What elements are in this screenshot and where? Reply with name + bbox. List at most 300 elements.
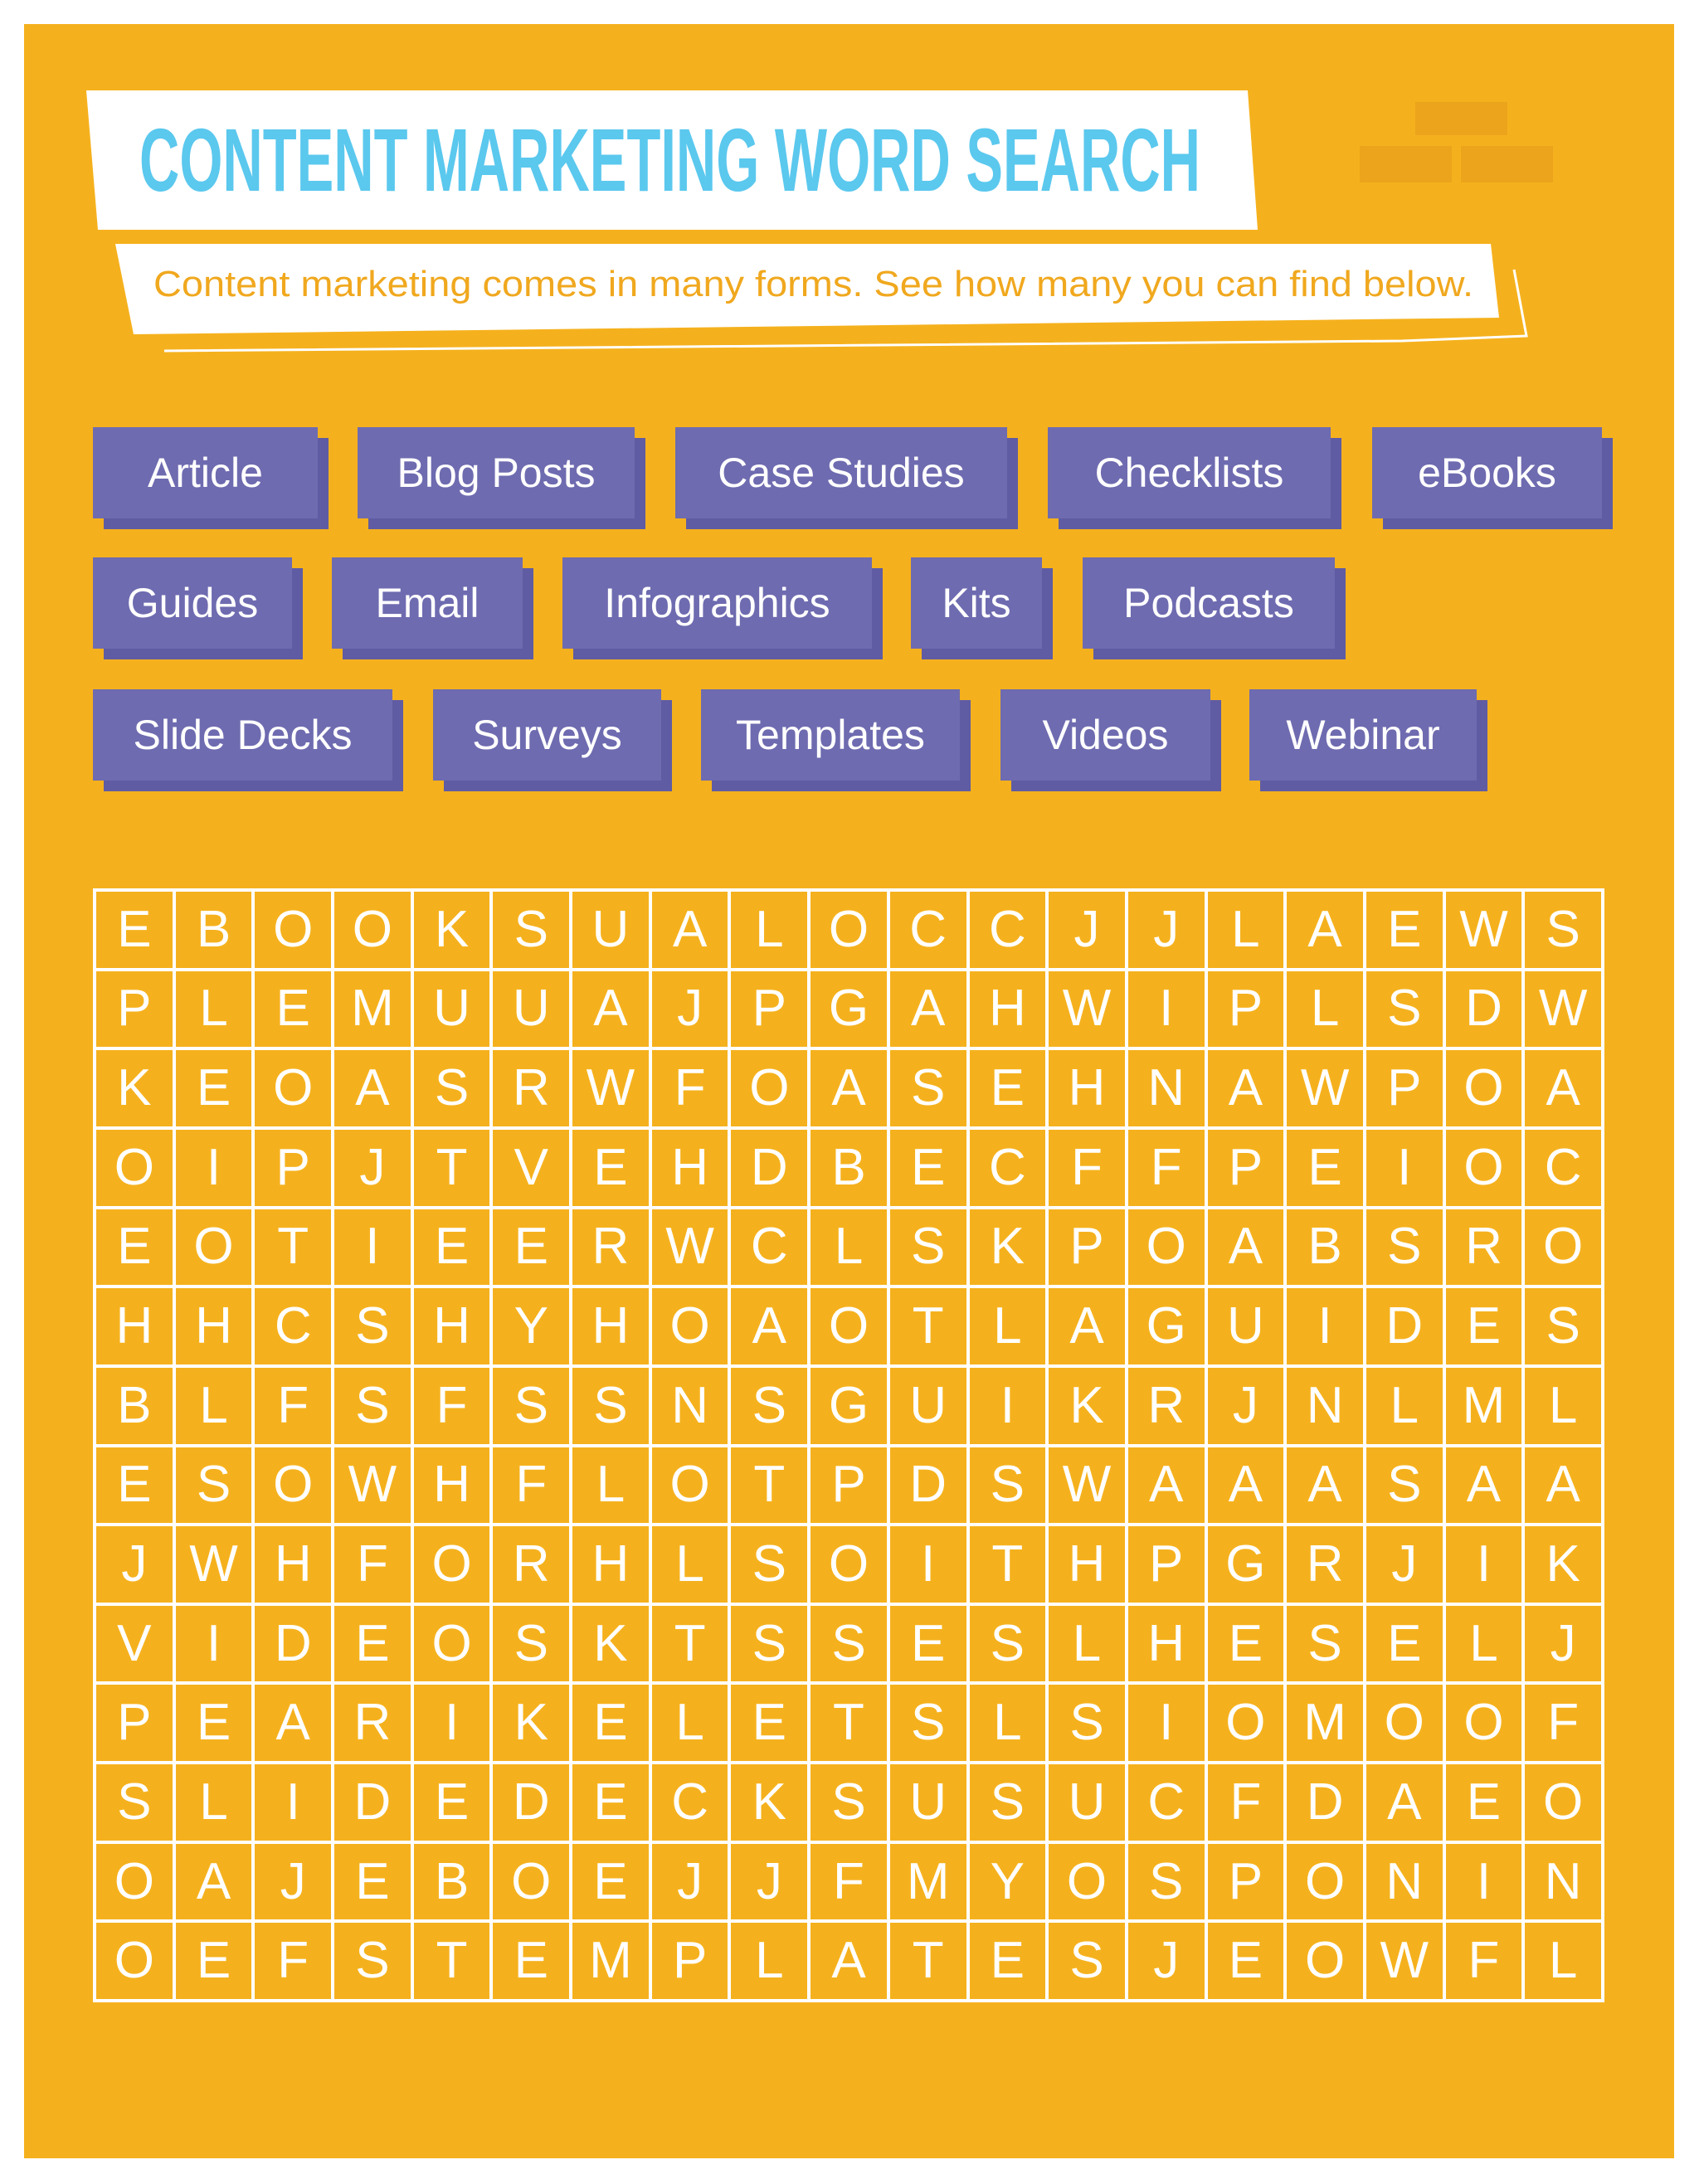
word search grid: T bbox=[833, 1694, 864, 1751]
subtitle banner bbox=[115, 244, 1526, 351]
word search grid: T bbox=[436, 1139, 468, 1196]
word search grid: A bbox=[593, 980, 628, 1037]
word search grid: O bbox=[1463, 1694, 1504, 1751]
word search grid: R bbox=[1307, 1535, 1343, 1593]
word search grid: A bbox=[1307, 901, 1342, 958]
word search grid: Y bbox=[991, 1853, 1025, 1910]
word search grid: G bbox=[1225, 1535, 1266, 1593]
word search grid: A bbox=[1229, 1218, 1263, 1275]
word search grid: S bbox=[355, 1932, 390, 1989]
word search grid: L bbox=[1073, 1615, 1101, 1672]
tag: Videos bbox=[1000, 689, 1210, 781]
word search grid: O bbox=[829, 901, 869, 958]
tag: Surveys bbox=[433, 689, 661, 781]
word search grid: L bbox=[596, 1456, 625, 1513]
word search grid: M bbox=[351, 980, 394, 1037]
word search grid: T bbox=[913, 1932, 944, 1989]
word search grid: E bbox=[197, 1059, 231, 1116]
word search grid: N bbox=[1385, 1853, 1423, 1910]
word search grid: A bbox=[1467, 1456, 1501, 1513]
word search grid: K bbox=[435, 901, 469, 958]
word search grid: O bbox=[749, 1059, 789, 1116]
word search grid: E bbox=[355, 1853, 390, 1910]
word search grid: M bbox=[589, 1932, 632, 1989]
tag: Guides bbox=[93, 557, 292, 649]
word search grid: G bbox=[829, 980, 869, 1037]
word search grid: O bbox=[114, 1139, 154, 1196]
word search grid: J bbox=[1074, 901, 1100, 958]
word search grid: L bbox=[199, 1773, 228, 1831]
tag: eBooks bbox=[1372, 427, 1602, 518]
word search grid: F bbox=[1071, 1139, 1103, 1196]
word search grid: O bbox=[353, 901, 392, 958]
word search grid: A bbox=[673, 901, 707, 958]
word search grid: P bbox=[673, 1932, 707, 1989]
word search grid: W bbox=[587, 1059, 635, 1116]
word search grid: J bbox=[1391, 1535, 1417, 1593]
word search grid: S bbox=[514, 1377, 548, 1434]
word search grid: O bbox=[1305, 1932, 1345, 1989]
tag: Infographics: Infographics bbox=[604, 580, 830, 626]
word search grid: A bbox=[276, 1694, 310, 1751]
word search grid: B bbox=[435, 1853, 469, 1910]
word search grid: P bbox=[752, 980, 786, 1037]
word search grid: L bbox=[835, 1218, 863, 1275]
subtitle banner: Content marketing comes in many forms. See how many you can find below. bbox=[153, 264, 1473, 304]
tag: Slide Decks: Slide Decks bbox=[133, 712, 352, 758]
word search grid: W bbox=[1301, 1059, 1349, 1116]
word search grid: P bbox=[117, 1694, 152, 1751]
word search grid: I bbox=[1397, 1139, 1411, 1196]
word search grid: A bbox=[911, 980, 945, 1037]
word search grid: L bbox=[199, 980, 228, 1037]
word search grid: L bbox=[1390, 1377, 1419, 1434]
word search grid: E bbox=[1467, 1773, 1501, 1831]
word search grid: H bbox=[275, 1535, 312, 1593]
word search grid: O bbox=[1543, 1773, 1583, 1831]
tag: Article bbox=[93, 427, 318, 518]
word search grid bbox=[93, 888, 1604, 2002]
word search grid: S bbox=[752, 1377, 786, 1434]
word search grid: K bbox=[593, 1615, 628, 1672]
word search grid: S bbox=[514, 901, 548, 958]
word search grid: H bbox=[195, 1297, 232, 1355]
word search grid: H bbox=[671, 1139, 708, 1196]
word search grid: B bbox=[117, 1377, 152, 1434]
word search grid: S bbox=[831, 1773, 866, 1831]
tag: Checklists bbox=[1048, 427, 1331, 518]
word search grid: P bbox=[1229, 1853, 1263, 1910]
word search grid: O bbox=[1146, 1218, 1186, 1275]
word search grid: O bbox=[273, 1456, 313, 1513]
word search grid: U bbox=[433, 980, 470, 1037]
word search grid: A bbox=[831, 1932, 866, 1989]
word search grid: L bbox=[1311, 980, 1339, 1037]
tag: Email: Email bbox=[375, 580, 480, 626]
word search grid: E bbox=[117, 1218, 152, 1275]
word search grid: L bbox=[755, 1932, 784, 1989]
tag: eBooks: eBooks bbox=[1418, 450, 1556, 496]
word search grid: S bbox=[1307, 1615, 1342, 1672]
word search grid: O bbox=[511, 1853, 551, 1910]
word search grid: V bbox=[514, 1139, 548, 1196]
word search grid: F bbox=[436, 1377, 468, 1434]
word search grid: S bbox=[514, 1615, 548, 1672]
word search grid: L bbox=[1549, 1377, 1577, 1434]
word search grid: W bbox=[189, 1535, 238, 1593]
word search grid: B bbox=[197, 901, 231, 958]
word search grid: J bbox=[757, 1853, 782, 1910]
word search grid: S bbox=[991, 1615, 1025, 1672]
word search grid: A bbox=[1229, 1456, 1263, 1513]
word search grid: Y bbox=[514, 1297, 548, 1355]
word search grid: U bbox=[1069, 1773, 1105, 1831]
word search grid: E bbox=[593, 1853, 628, 1910]
word search grid: O bbox=[1463, 1059, 1504, 1116]
word search grid: I bbox=[207, 1139, 221, 1196]
word search grid: E bbox=[593, 1694, 628, 1751]
word search grid: F bbox=[1547, 1694, 1579, 1751]
word search grid: O bbox=[1305, 1853, 1345, 1910]
tag: Checklists: Checklists bbox=[1095, 450, 1283, 496]
word search grid: J bbox=[677, 1853, 703, 1910]
word search grid: M bbox=[1463, 1377, 1505, 1434]
word search grid: D bbox=[275, 1615, 312, 1672]
word search grid: H bbox=[433, 1456, 470, 1513]
word search grid: S bbox=[1387, 1218, 1421, 1275]
word search grid: H bbox=[1069, 1535, 1105, 1593]
word search grid: H bbox=[592, 1297, 629, 1355]
word search grid: I bbox=[1159, 980, 1173, 1037]
word search grid: D bbox=[353, 1773, 391, 1831]
tag: Article: Article bbox=[148, 450, 263, 496]
word search grid: O bbox=[114, 1853, 154, 1910]
word search grid: E bbox=[197, 1932, 231, 1989]
word search grid: E bbox=[276, 980, 310, 1037]
word search grid: E bbox=[991, 1932, 1025, 1989]
word search grid: O bbox=[431, 1535, 472, 1593]
word search grid: D bbox=[1307, 1773, 1343, 1831]
word search grid: S bbox=[435, 1059, 469, 1116]
word search grid: A bbox=[197, 1853, 231, 1910]
word search grid: R bbox=[1465, 1218, 1502, 1275]
tag: Videos: Videos bbox=[1042, 712, 1168, 758]
word search grid: W bbox=[665, 1218, 714, 1275]
word search grid: F bbox=[1151, 1139, 1182, 1196]
word search grid: W bbox=[1380, 1932, 1429, 1989]
word search grid: I bbox=[445, 1694, 459, 1751]
word search grid: O bbox=[1463, 1139, 1504, 1196]
tag: Webinar: Webinar bbox=[1286, 712, 1440, 758]
word search grid: C bbox=[1147, 1773, 1185, 1831]
word search grid: O bbox=[114, 1932, 154, 1989]
word search grid: T bbox=[674, 1615, 706, 1672]
word search grid: S bbox=[197, 1456, 231, 1513]
word search grid: R bbox=[513, 1535, 550, 1593]
tag: Slide Decks bbox=[93, 689, 392, 781]
word search grid: L bbox=[675, 1535, 704, 1593]
word search grid: L bbox=[1549, 1932, 1577, 1989]
word search grid: L bbox=[993, 1297, 1022, 1355]
word search grid: G bbox=[1146, 1297, 1186, 1355]
word search grid: T bbox=[436, 1932, 468, 1989]
word search grid: E bbox=[593, 1773, 628, 1831]
word search grid: S bbox=[355, 1297, 390, 1355]
word search grid: O bbox=[829, 1535, 869, 1593]
word search grid: E bbox=[1307, 1139, 1342, 1196]
word search grid: D bbox=[751, 1139, 788, 1196]
word search grid: A bbox=[1387, 1773, 1421, 1831]
tag: Kits bbox=[911, 557, 1042, 649]
word search grid: I bbox=[1159, 1694, 1173, 1751]
word search grid: N bbox=[1147, 1059, 1185, 1116]
title banner bbox=[86, 90, 1258, 230]
word search grid: A bbox=[831, 1059, 866, 1116]
word search grid: K bbox=[1546, 1535, 1580, 1593]
word search grid: S bbox=[1387, 980, 1421, 1037]
word search grid: O bbox=[193, 1218, 234, 1275]
tag: Blog Posts: Blog Posts bbox=[397, 450, 596, 496]
word search grid: J bbox=[677, 980, 703, 1037]
word search grid: J bbox=[359, 1139, 385, 1196]
word search grid: I bbox=[1000, 1377, 1015, 1434]
word search grid: J bbox=[121, 1535, 147, 1593]
word search grid: J bbox=[280, 1853, 306, 1910]
word search grid: O bbox=[670, 1456, 710, 1513]
word search grid: S bbox=[593, 1377, 628, 1434]
word search grid: S bbox=[831, 1615, 866, 1672]
word search grid: U bbox=[513, 980, 550, 1037]
word search grid: U bbox=[909, 1377, 947, 1434]
word search grid: T bbox=[991, 1535, 1023, 1593]
word search grid: S bbox=[1069, 1694, 1104, 1751]
word search grid: S bbox=[117, 1773, 152, 1831]
word search grid: F bbox=[1468, 1932, 1499, 1989]
word search grid: B bbox=[1307, 1218, 1342, 1275]
tag: Webinar bbox=[1249, 689, 1477, 781]
word search grid: W bbox=[1539, 980, 1587, 1037]
word search grid: K bbox=[514, 1694, 548, 1751]
word search grid: P bbox=[1149, 1535, 1183, 1593]
word search grid: J bbox=[1551, 1615, 1576, 1672]
word search grid: M bbox=[907, 1853, 949, 1910]
word search grid: U bbox=[592, 901, 629, 958]
word search grid: S bbox=[1546, 901, 1580, 958]
word search grid: E bbox=[1387, 1615, 1421, 1672]
word search grid: F bbox=[277, 1377, 309, 1434]
tag: Email bbox=[332, 557, 523, 649]
word search grid: J bbox=[1233, 1377, 1258, 1434]
word search grid: H bbox=[433, 1297, 470, 1355]
word search grid: E bbox=[514, 1932, 548, 1989]
tag: Podcasts bbox=[1083, 557, 1335, 649]
word search grid: A bbox=[1069, 1297, 1104, 1355]
word search grid: A bbox=[1546, 1059, 1580, 1116]
word search grid: W bbox=[1063, 980, 1111, 1037]
word search grid: I bbox=[1477, 1535, 1491, 1593]
word search grid: G bbox=[829, 1377, 869, 1434]
word search grid: P bbox=[1229, 1139, 1263, 1196]
word search grid: K bbox=[991, 1218, 1025, 1275]
word search grid: O bbox=[829, 1297, 869, 1355]
word search grid: L bbox=[675, 1694, 704, 1751]
word search grid: K bbox=[117, 1059, 152, 1116]
word search grid: E bbox=[1467, 1297, 1501, 1355]
word search grid: E bbox=[1229, 1932, 1263, 1989]
word search grid: T bbox=[753, 1456, 785, 1513]
word search grid: H bbox=[115, 1297, 153, 1355]
word search grid: L bbox=[755, 901, 784, 958]
word search grid: I bbox=[921, 1535, 935, 1593]
word search grid: F bbox=[674, 1059, 706, 1116]
word search grid: D bbox=[1465, 980, 1502, 1037]
word search grid: K bbox=[1069, 1377, 1104, 1434]
word search grid: K bbox=[752, 1773, 786, 1831]
word search grid: M bbox=[1303, 1694, 1346, 1751]
tag: Blog Posts bbox=[358, 427, 635, 518]
word search grid: P bbox=[831, 1456, 866, 1513]
word search grid: O bbox=[273, 1059, 313, 1116]
word search grid: R bbox=[1147, 1377, 1185, 1434]
word search grid: V bbox=[117, 1615, 152, 1672]
decoration: bricks bbox=[1360, 102, 1553, 182]
word search grid: O bbox=[431, 1615, 472, 1672]
word search grid: S bbox=[991, 1773, 1025, 1831]
word search grid: E bbox=[197, 1694, 231, 1751]
word search grid: A bbox=[1149, 1456, 1183, 1513]
word search grid: H bbox=[1069, 1059, 1105, 1116]
word search grid: O bbox=[273, 901, 313, 958]
tag: Templates: Templates bbox=[736, 712, 925, 758]
word search grid: S bbox=[911, 1218, 945, 1275]
word search grid: A bbox=[1546, 1456, 1580, 1513]
word search grid: C bbox=[751, 1218, 788, 1275]
word search grid: W bbox=[1063, 1456, 1111, 1513]
word search grid: P bbox=[117, 980, 152, 1037]
word search grid: A bbox=[355, 1059, 390, 1116]
word search grid: O bbox=[1385, 1694, 1424, 1751]
word search grid: S bbox=[752, 1615, 786, 1672]
word search grid: T bbox=[913, 1297, 944, 1355]
word search grid: I bbox=[1317, 1297, 1332, 1355]
word search grid: C bbox=[275, 1297, 312, 1355]
word search grid: C bbox=[989, 901, 1026, 958]
word search grid: C bbox=[1545, 1139, 1582, 1196]
word search grid: N bbox=[1307, 1377, 1343, 1434]
word search grid: P bbox=[1229, 980, 1263, 1037]
word search grid: R bbox=[353, 1694, 391, 1751]
word search grid: L bbox=[1231, 901, 1260, 958]
word search grid: J bbox=[1153, 901, 1179, 958]
word search grid: D bbox=[909, 1456, 947, 1513]
word search grid: E bbox=[435, 1218, 469, 1275]
word search grid: P bbox=[1069, 1218, 1104, 1275]
word search grid: W bbox=[1459, 901, 1508, 958]
word search grid: F bbox=[515, 1456, 547, 1513]
word search grid: F bbox=[1229, 1773, 1261, 1831]
word search grid: P bbox=[1387, 1059, 1421, 1116]
word search grid: S bbox=[911, 1694, 945, 1751]
word search grid: A bbox=[752, 1297, 786, 1355]
word search grid: R bbox=[513, 1059, 550, 1116]
word search grid: S bbox=[1069, 1932, 1104, 1989]
word search grid: J bbox=[1153, 1932, 1179, 1989]
word search grid: C bbox=[909, 901, 947, 958]
word search grid: H bbox=[989, 980, 1026, 1037]
word search grid: C bbox=[671, 1773, 708, 1831]
word search grid: S bbox=[991, 1456, 1025, 1513]
word search grid: C bbox=[989, 1139, 1026, 1196]
tag: Guides: Guides bbox=[127, 580, 258, 626]
word search grid: E bbox=[117, 1456, 152, 1513]
word search grid: E bbox=[991, 1059, 1025, 1116]
word search grid: I bbox=[1477, 1853, 1491, 1910]
word search grid: S bbox=[1546, 1297, 1580, 1355]
word search grid: L bbox=[199, 1377, 228, 1434]
word search grid: L bbox=[1469, 1615, 1498, 1672]
word search grid: F bbox=[277, 1932, 309, 1989]
header bbox=[86, 90, 1553, 352]
tag: Surveys: Surveys bbox=[472, 712, 622, 758]
word search grid: F bbox=[357, 1535, 388, 1593]
word search grid: I bbox=[365, 1218, 380, 1275]
word search grid: U bbox=[909, 1773, 947, 1831]
word search grid: W bbox=[348, 1456, 397, 1513]
word search grid: E bbox=[593, 1139, 628, 1196]
word search grid: E bbox=[1229, 1615, 1263, 1672]
tags bbox=[93, 427, 1613, 791]
word search grid: R bbox=[592, 1218, 629, 1275]
word search grid: E bbox=[1387, 901, 1421, 958]
word search grid: N bbox=[671, 1377, 708, 1434]
word search grid: O bbox=[1067, 1853, 1107, 1910]
word search grid: A bbox=[1307, 1456, 1342, 1513]
word search grid: T bbox=[277, 1218, 309, 1275]
word search grid: S bbox=[1387, 1456, 1421, 1513]
word search grid: E bbox=[435, 1773, 469, 1831]
word search grid: N bbox=[1545, 1853, 1582, 1910]
word search grid: I bbox=[286, 1773, 300, 1831]
word search grid: E bbox=[911, 1139, 945, 1196]
word search grid: O bbox=[1543, 1218, 1583, 1275]
word search grid: S bbox=[911, 1059, 945, 1116]
word search grid: H bbox=[1147, 1615, 1185, 1672]
word search grid: I bbox=[207, 1615, 221, 1672]
word search grid: H bbox=[592, 1535, 629, 1593]
tag: Podcasts: Podcasts bbox=[1123, 580, 1294, 626]
tag: Case Studies: Case Studies bbox=[718, 450, 965, 496]
word search grid: B bbox=[831, 1139, 866, 1196]
word search grid: U bbox=[1227, 1297, 1264, 1355]
word search grid: D bbox=[513, 1773, 550, 1831]
word search grid: O bbox=[670, 1297, 710, 1355]
word search grid: A bbox=[1229, 1059, 1263, 1116]
word search grid: F bbox=[833, 1853, 864, 1910]
word search grid: P bbox=[276, 1139, 310, 1196]
word search grid: S bbox=[1149, 1853, 1183, 1910]
word search grid: E bbox=[514, 1218, 548, 1275]
word search grid: E bbox=[752, 1694, 786, 1751]
tag: Case Studies bbox=[675, 427, 1007, 518]
tag: Kits: Kits bbox=[942, 580, 1011, 626]
word search grid: E bbox=[355, 1615, 390, 1672]
word search grid: O bbox=[1225, 1694, 1266, 1751]
word search grid: S bbox=[752, 1535, 786, 1593]
word search grid: D bbox=[1385, 1297, 1423, 1355]
word search grid: S bbox=[355, 1377, 390, 1434]
word search grid: E bbox=[911, 1615, 945, 1672]
tag: Templates bbox=[701, 689, 960, 781]
